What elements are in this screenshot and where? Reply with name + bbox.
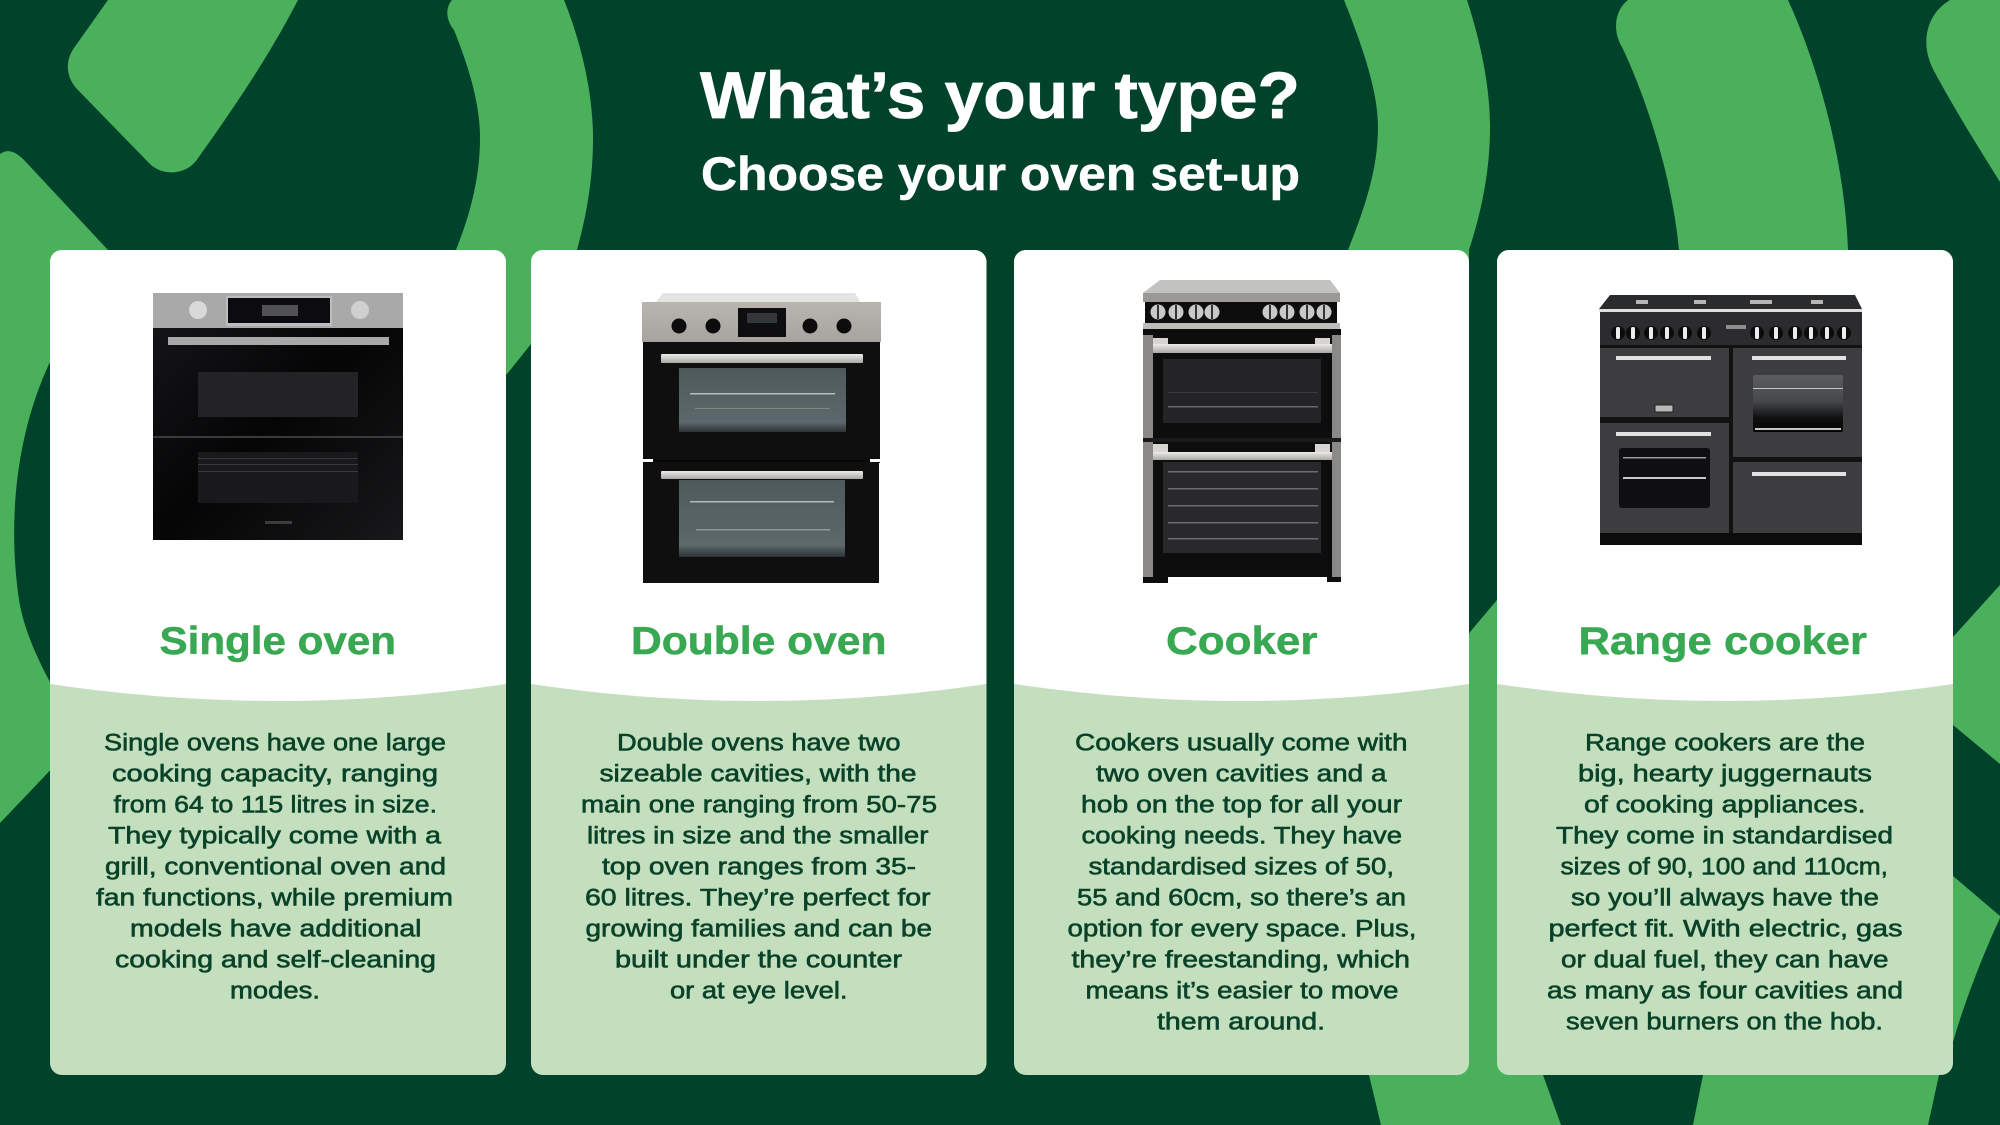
text: range cooker: [1547, 730, 1903, 1036]
text: cooker: [1068, 730, 1416, 1036]
text: cooker: they’re freestanding, which: [1072, 946, 1410, 974]
text: double oven: growing families and can be: [586, 916, 932, 942]
text: single oven: grill, conventional oven and: [105, 854, 446, 880]
heading: single oven: Single oven: [160, 620, 396, 663]
text: range cooker: big, hearty juggernauts: [1578, 760, 1872, 788]
text: range cooker: seven burners on the hob.: [1566, 1008, 1883, 1036]
subtitle: Choose your oven set-up: [701, 147, 1300, 200]
text: single oven: cooking capacity, ranging: [112, 760, 438, 788]
text: cooker: 55 and 60cm, so there’s an: [1077, 884, 1406, 912]
text: single oven: from 64 to 115 litres in size.: [114, 792, 437, 818]
text: double oven: [581, 730, 937, 1004]
icon: single oven: [153, 293, 403, 540]
text: single oven: modes.: [230, 978, 320, 1004]
icon: cooker: [1143, 280, 1341, 583]
panel: range cooker: [1497, 250, 1953, 1075]
heading: double oven: Double oven: [631, 620, 886, 663]
heading: range cooker: Range cooker: [1578, 620, 1867, 663]
text: cooker: Cookers usually come with: [1075, 730, 1408, 756]
text: double oven: 60 litres. They’re perfect for: [585, 884, 930, 912]
text: double oven: litres in size and the smaller: [587, 822, 929, 850]
text: double oven: main one ranging from 50-75: [581, 792, 937, 818]
text: range cooker: They come in standardised: [1556, 822, 1893, 850]
icon: range cooker: [1599, 295, 1862, 545]
text: range cooker: perfect fit. With electric, gas: [1548, 916, 1902, 942]
text: double oven: Double ovens have two: [617, 730, 900, 756]
text: cooker: hob on the top for all your: [1081, 792, 1402, 818]
text: range cooker: or dual fuel, they can have: [1561, 946, 1888, 974]
panel: double oven: [531, 250, 986, 1075]
text: range cooker: so you’ll always have the: [1571, 884, 1879, 912]
text: cooker: two oven cavities and a: [1096, 760, 1387, 788]
text: double oven: sizeable cavities, with the: [600, 760, 916, 788]
text: double oven: built under the counter: [615, 946, 902, 974]
panel: single oven: [50, 250, 506, 1075]
text: single oven: [96, 730, 453, 1004]
text: cooker: option for every space. Plus,: [1068, 916, 1416, 942]
text: range cooker: Range cookers are the: [1585, 730, 1865, 756]
text: single oven: Single ovens have one large: [104, 730, 446, 756]
text: cooker: standardised sizes of 50,: [1088, 854, 1394, 880]
icon: double oven: [642, 293, 881, 583]
title: What’s your type?: [700, 58, 1300, 132]
text: single oven: fan functions, while premium: [96, 884, 453, 912]
heading: cooker: Cooker: [1166, 620, 1318, 663]
text: single oven: models have additional: [130, 916, 422, 942]
text: cooker: them around.: [1157, 1008, 1325, 1036]
text: single oven: cooking and self-cleaning: [115, 946, 436, 974]
text: single oven: They typically come with a: [108, 822, 442, 850]
text: range cooker: as many as four cavities and: [1547, 978, 1903, 1004]
text: range cooker: sizes of 90, 100 and 110cm,: [1560, 854, 1888, 880]
panel: cooker: [1014, 250, 1469, 1075]
text: cooker: means it’s easier to move: [1086, 978, 1398, 1004]
text: double oven: top oven ranges from 35-: [602, 854, 916, 880]
text: range cooker: of cooking appliances.: [1584, 792, 1866, 818]
text: cooker: cooking needs. They have: [1082, 822, 1402, 850]
text: double oven: or at eye level.: [670, 978, 848, 1004]
